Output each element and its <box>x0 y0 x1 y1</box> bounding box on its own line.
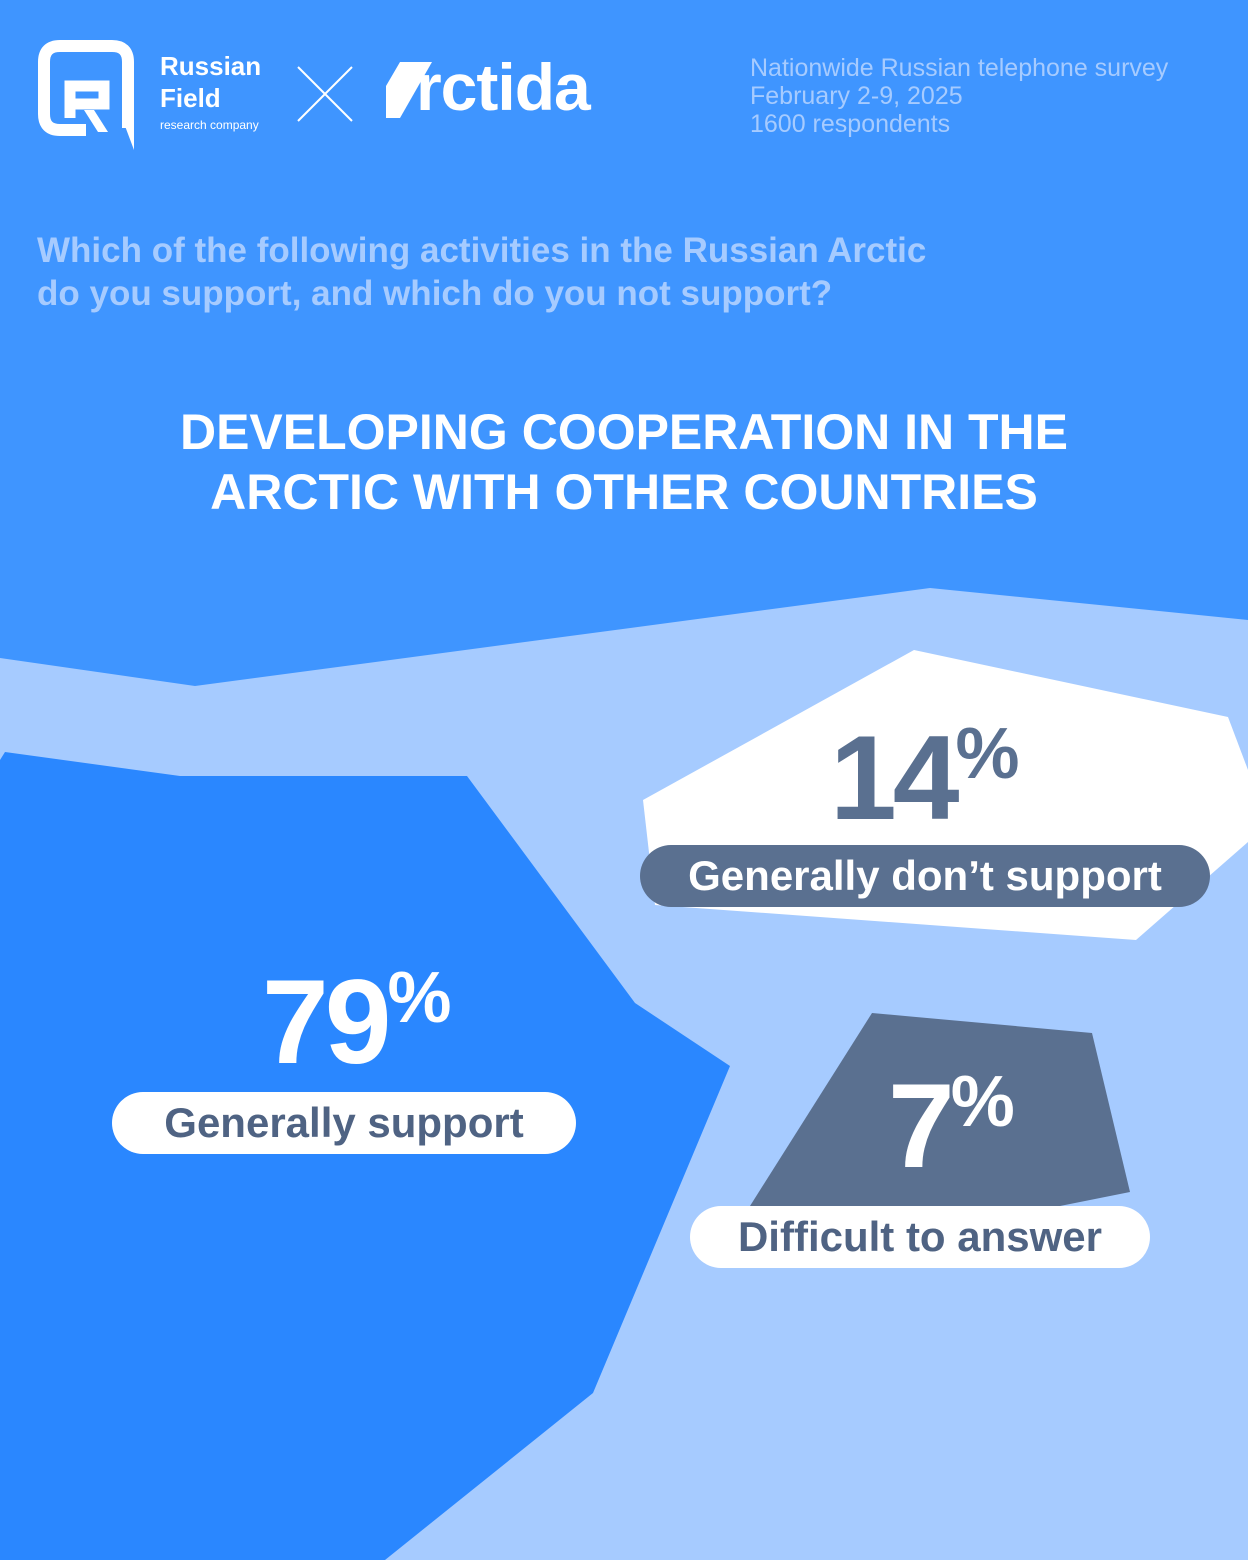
title: DEVELOPING COOPERATION IN THE <box>180 404 1068 460</box>
pill: Generally support <box>112 1092 576 1154</box>
grey difficult shape <box>750 1013 1130 1206</box>
pill: Generally don't support: Generally don’t support <box>688 852 1162 899</box>
pill: Difficult to answer <box>690 1206 1150 1268</box>
pill: Generally support: Generally support <box>164 1099 524 1146</box>
white dont support shape <box>643 650 1248 940</box>
icon: cross <box>297 66 353 122</box>
logo: Russian Field: Russian <box>160 51 261 81</box>
number 14%: 14% <box>830 711 1020 845</box>
logo: Russian Field <box>38 40 261 150</box>
logo: Russian Field: Field <box>160 83 221 113</box>
question <box>37 231 926 313</box>
number 7%: 7% <box>888 1059 1015 1193</box>
question: Which of the following activities in the Russian Arctic <box>37 231 926 270</box>
title <box>180 404 1068 520</box>
logo: Russian Field: research company <box>160 118 259 132</box>
light ice region <box>0 588 1248 1560</box>
logo: Arctida: rctida <box>416 50 590 124</box>
survey info <box>750 54 1168 138</box>
title: ARCTIC WITH OTHER COUNTRIES <box>210 464 1038 520</box>
question: do you support, and which do you not support? <box>37 274 832 313</box>
pill: Difficult to answer: Difficult to answer <box>738 1213 1102 1260</box>
survey info: 1600 respondents <box>750 110 950 138</box>
survey info: Nationwide Russian telephone survey <box>750 54 1168 82</box>
survey info: February 2-9, 2025 <box>750 82 963 110</box>
number 79%: 79% <box>262 955 452 1089</box>
dark blue support shape <box>0 752 730 1560</box>
pill: Generally don't support <box>640 845 1210 907</box>
